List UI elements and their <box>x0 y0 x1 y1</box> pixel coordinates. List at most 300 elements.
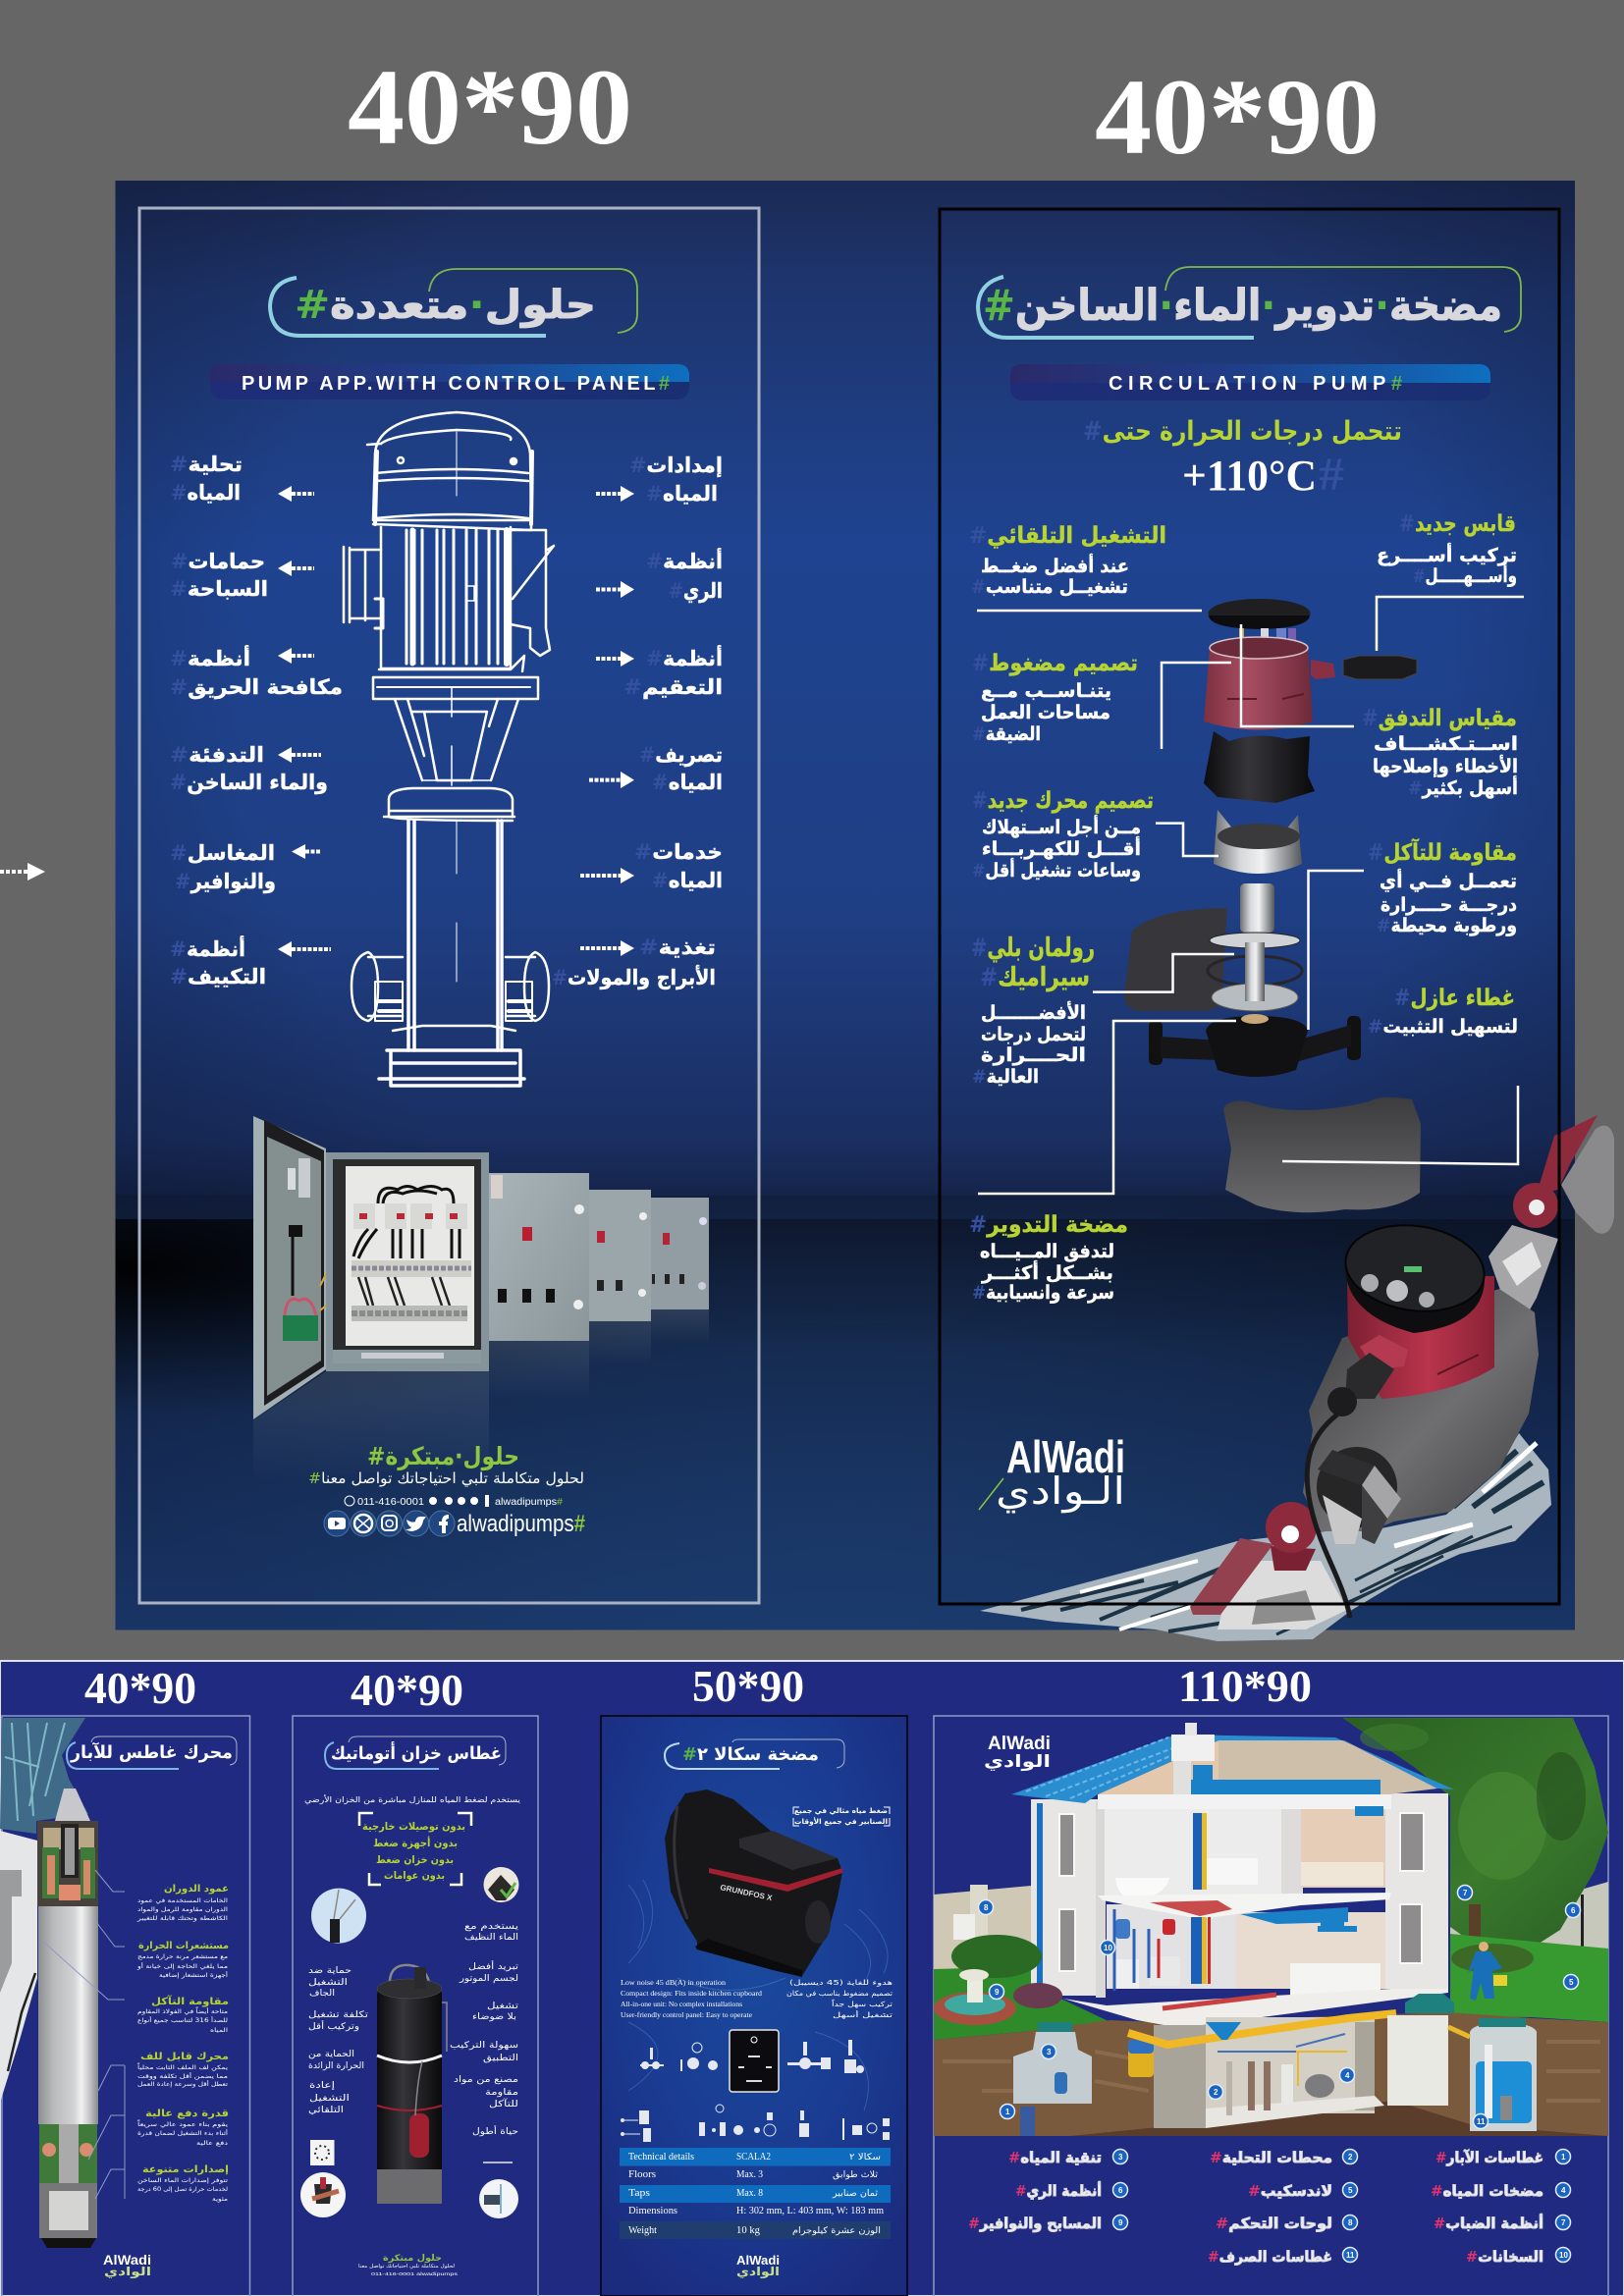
benefits right column: مقاومة <box>485 2088 518 2098</box>
service labels: right column: المياه# <box>652 771 723 794</box>
feature: circulation pump: مضخة التدوير# <box>969 1212 1128 1238</box>
footer: حلول مبتكرة <box>383 2254 442 2264</box>
black housing <box>1204 731 1315 803</box>
small heading: 40*90 second: 40*90 <box>351 1666 463 1715</box>
temperature value: +110°C <box>1182 452 1317 500</box>
caption: الصنابير في جميع الأوقات <box>794 1817 888 1826</box>
footer: innovative solutions: 011-416-0001 <box>357 1497 424 1508</box>
feature: ceramic bearing <box>971 934 1095 1088</box>
service list: column 1: أنظمة الضباب# <box>1434 2214 1543 2232</box>
soil <box>934 2012 1608 2136</box>
fountain <box>934 1969 1016 2025</box>
technical table: 10 kg <box>736 2225 760 2236</box>
numbered markers: 5 <box>1569 1978 1574 1987</box>
benefits left column: الحرارة الزائدة <box>308 2061 364 2071</box>
technical table: ثلاث طوابق <box>833 2170 879 2180</box>
technical table: Weight <box>628 2225 657 2236</box>
red motor housing <box>1204 637 1335 730</box>
logo: AlWadi <box>736 2253 780 2268</box>
exploded pump parts <box>977 597 1524 1212</box>
numbered markers <box>978 1885 1581 2128</box>
service labels: right column: تغذية# <box>639 935 716 959</box>
logo: الوادي <box>736 2265 780 2279</box>
grey background <box>0 0 1624 1661</box>
feature texts <box>136 1884 229 2203</box>
pump base <box>1149 1014 1361 1077</box>
feature: automatic operation: التشغيل التلقائي# <box>969 523 1166 549</box>
feature: ceramic bearing: رولمان بلي# <box>971 934 1095 963</box>
feature: circulation pump: سرعة وانسيابية# <box>972 1282 1114 1304</box>
lower floor rooms <box>1107 1904 1385 1995</box>
numbered markers: 3 <box>1047 2048 1052 2056</box>
features arabic: تركيب سهل جداً <box>831 1999 893 2008</box>
features english <box>621 1979 763 2019</box>
numbered markers: 10 <box>1104 1944 1112 1952</box>
title: محرك غاطس للآبار <box>70 1741 233 1763</box>
feature texts: تتوفر إصدارات الماء الساخن <box>137 2177 228 2184</box>
attic <box>1098 1740 1437 1794</box>
title: غطاس خزان أتوماتيك <box>331 1741 502 1764</box>
service labels: left column: أنظمة# <box>170 644 250 670</box>
lower duct <box>1240 1907 1357 1932</box>
service list: column 1 <box>1431 2149 1571 2266</box>
numbered markers: 9 <box>995 1988 1000 1997</box>
filter vessel <box>1128 2040 1154 2077</box>
feature: ceramic bearing: العالية# <box>972 1066 1039 1088</box>
benefits right column: سهولة التركيب <box>450 2041 518 2051</box>
numbered markers: 8 <box>984 1903 989 1912</box>
logo <box>979 1431 1125 1514</box>
feature: circulation pump: بشــكل أكثـــر <box>981 1260 1113 1284</box>
numbered markers: 11 <box>1477 2117 1486 2126</box>
service list: column 3: تنقية المياه# <box>1008 2149 1102 2166</box>
chimney <box>1171 1723 1215 1795</box>
technical table: Max. 3 <box>736 2169 763 2180</box>
benefits left column: التشغيل <box>308 1978 348 1988</box>
service labels: left column: مكافحة الحريق# <box>170 675 343 699</box>
risers lower <box>1191 1917 1211 1984</box>
scala pump photo <box>665 1789 842 1977</box>
service labels: left column: والماء الساخن# <box>170 771 328 794</box>
title frame <box>665 1739 844 1769</box>
panel: automatic tank submersible <box>293 1716 538 2296</box>
service list: column 2: 11 <box>1346 2251 1355 2260</box>
logo: AlWadi <box>103 2252 151 2268</box>
open door <box>253 1116 329 1419</box>
subtitle band: CIRCULATION PUMP # <box>1109 373 1402 395</box>
top display disc <box>1208 599 1310 650</box>
panel: multiple solutions <box>139 208 759 1603</box>
service list: column 2: 8 <box>1348 2218 1353 2227</box>
feature: compact design: مساحات العمل <box>981 702 1110 723</box>
feature: corrosion resistance: درجـــة حــــرارة <box>1380 894 1517 916</box>
logo: الوادي <box>984 1752 1051 1772</box>
service labels: right column <box>552 454 723 990</box>
feature: insulating cover: غطاء عازل# <box>1394 986 1515 1011</box>
benefits right column: مصنع من مواد <box>454 2075 518 2085</box>
feature texts: مع مستشعر مرنة حرارة مدمج <box>137 1953 228 1960</box>
service labels: right column: الأبراج والمولات# <box>552 964 716 990</box>
service labels: right column: الري# <box>669 579 723 604</box>
left well <box>1013 2022 1092 2136</box>
feature: circulation pump <box>969 1212 1128 1304</box>
insulation jacket <box>1124 908 1227 1011</box>
title: مضخة·تدوير·الماء·الساخن# <box>983 281 1502 331</box>
feature: flow meter: مقياس التدفق# <box>1362 706 1517 731</box>
service list: column 2: 5 <box>1348 2186 1353 2195</box>
feature: new plug: تركيب أســــرع <box>1377 543 1517 566</box>
septic tank lid <box>1405 1994 1454 2013</box>
lawns <box>934 1934 1608 2040</box>
subtitle band <box>210 364 689 400</box>
feature: new motor design: وساعات تشغيل أقل# <box>972 858 1141 881</box>
tree <box>1342 1718 1608 1953</box>
service list: column 2: غطاسات الصرف# <box>1208 2248 1332 2266</box>
ground slab <box>1063 1989 1448 2028</box>
tank pump <box>377 1965 447 2204</box>
plug <box>1343 656 1417 679</box>
feature: compact design: الضيقة# <box>972 723 1041 745</box>
windows <box>1059 1813 1424 1971</box>
benefits left column: التشغيل <box>309 2094 350 2104</box>
feature texts: مئوية <box>212 2196 228 2203</box>
features arabic <box>786 1979 893 2019</box>
feature texts: الكاشطة وتحتك قابلة للتغيير <box>136 1915 228 1922</box>
right well <box>1448 2018 1537 2131</box>
technical table: Floors <box>628 2169 656 2180</box>
subtitle band <box>1010 364 1490 400</box>
basement <box>1154 2017 1384 2128</box>
service labels: left column: تحلية# <box>170 453 243 476</box>
feature: corrosion resistance <box>1368 837 1517 936</box>
panel: submersible well motor <box>0 1716 249 2296</box>
function icons <box>621 2040 890 2142</box>
service list: column 3: 3 <box>1118 2153 1123 2162</box>
benefits left column: وتركيب أقل <box>308 2020 359 2032</box>
technical table: Max. 8 <box>736 2188 763 2199</box>
floor reflection <box>253 1309 709 1482</box>
technical table: SCALA2 <box>736 2152 771 2163</box>
feature texts: إصدارات متنوعة <box>142 2164 229 2175</box>
connector <box>1327 1335 1408 1416</box>
house walls <box>1031 1793 1448 1998</box>
service list: column 3 <box>968 2149 1127 2232</box>
pump blueprint sketch <box>344 412 554 1086</box>
service labels: left column: المياه# <box>171 481 241 505</box>
technical table <box>620 2148 891 2239</box>
benefits left column: حماية ضد <box>308 1966 352 1976</box>
benefits right column: للتآكل <box>489 2098 518 2109</box>
logo <box>736 2253 780 2279</box>
feature: new motor design: تصميم محرك جديد# <box>972 788 1154 814</box>
feature texts: الدوران مقاومة للرمل والمواد <box>137 1906 228 1913</box>
benefits left column: الجاف <box>309 1989 335 1999</box>
service labels: left column: والنوافير# <box>175 870 276 893</box>
benefits left column: الحماية من <box>308 2050 354 2059</box>
service list: column 1: 7 <box>1561 2218 1566 2227</box>
shaft <box>1240 883 1274 933</box>
service labels: right column: المياه# <box>646 482 718 506</box>
risers upper <box>1193 1813 1207 1890</box>
features english: Compact design: Fits inside kitchen cupboard <box>621 1990 763 1998</box>
panel: circulation pump <box>940 209 1614 1641</box>
heading: size 40*90 left: 40*90 <box>348 47 632 167</box>
service list: column 3: المسابح والنوافير# <box>968 2215 1102 2232</box>
white machinery photo <box>0 1831 37 2103</box>
benefits left column: إعادة <box>309 2081 335 2091</box>
title frame <box>67 1736 237 1769</box>
subtitle band: PUMP APP.WITH CONTROL PANEL# <box>242 373 670 395</box>
no-needs list: بدون توصيلات خارجية <box>362 1821 465 1833</box>
heading: size 40*90 right: 40*90 <box>1095 57 1380 177</box>
benefits right column: تشغيل <box>487 2002 519 2011</box>
water splash texture <box>628 1880 888 2110</box>
panel background <box>601 1716 907 2296</box>
feature: insulating cover <box>1368 986 1518 1038</box>
small heading: 110*90: 110*90 <box>1178 1662 1312 1711</box>
service labels: left column: السباحة# <box>170 577 268 601</box>
feature texts: قدرة دفع عالية <box>145 2109 229 2119</box>
back panel 2 <box>589 1190 651 1321</box>
title: مضخة سكالا ٢# <box>682 1744 819 1765</box>
technical table: Taps <box>628 2188 650 2199</box>
panel frame <box>934 1716 1608 2296</box>
feature texts: عمود الدوران <box>164 1884 229 1895</box>
scala pump photo: GRUNDFOS X <box>720 1883 774 1902</box>
service labels: left column: أنظمة# <box>170 934 245 961</box>
downpipe <box>1037 1803 1043 1984</box>
features english: All-in-one unit: No complex installations <box>621 2001 742 2008</box>
title: حلول·متعددة# <box>295 283 596 328</box>
logo: AlWadi <box>988 1734 1051 1754</box>
technical table: H: 302 mm, L: 403 mm, W: 183 mm <box>736 2206 884 2216</box>
service list: column 2: 2 <box>1348 2153 1353 2162</box>
service list: column 2: محطات التحلية# <box>1210 2149 1332 2166</box>
service labels: right column: إمدادات# <box>629 454 723 477</box>
feature texts: مستشعرات الحرارة <box>138 1941 229 1951</box>
small heading: 40*90: 40*90 <box>84 1664 196 1713</box>
footer: innovative solutions: alwadipumps # <box>495 1497 563 1508</box>
benefits right column: لجسم الموتور <box>459 1974 518 1984</box>
heating floor <box>1150 1900 1232 1916</box>
white shaft <box>1387 2015 1448 2106</box>
panel frame <box>139 208 759 1603</box>
roof <box>1011 1735 1454 1803</box>
service list: column 1: مضخات المياه# <box>1431 2182 1543 2200</box>
stator <box>1214 810 1302 874</box>
numbered markers: 2 <box>1214 2088 1218 2097</box>
feature texts: متاحة أيضاً في الفولاذ المقاوم <box>137 2007 228 2015</box>
feature texts: يقوم بناء عمود عالي سريعاً <box>136 2120 228 2128</box>
footer: innovative solutions: لحلول متكاملة تلبي احتياجاتك تواصل معنا# <box>308 1469 584 1488</box>
service labels: left column <box>170 453 343 988</box>
benefits left column: تكلفة تشغيل <box>308 2010 369 2020</box>
technical table: سكالا ٢ <box>849 2153 881 2163</box>
feature: new plug <box>1377 511 1517 587</box>
service list: column 2 <box>1208 2149 1357 2266</box>
feature: automatic operation: عند أفضل ضغــط <box>981 554 1129 577</box>
service list: column 3: أنظمة الري# <box>1015 2181 1102 2201</box>
red motor <box>1347 1276 1494 1399</box>
water photo <box>0 1718 88 1834</box>
bearing rings <box>1208 933 1302 1011</box>
feature texts: تعطل أقل وسرعة إعادة العمل <box>137 2080 228 2088</box>
feature: new motor design <box>972 788 1154 881</box>
panel: house water systems <box>934 1716 1608 2296</box>
feature texts: مما يلغي الحاجة إلى خيانة أو <box>136 1962 228 1970</box>
numbered markers: 7 <box>1463 1889 1468 1897</box>
yellow main pipe <box>1128 2013 1396 2045</box>
feature: new plug: وأســـهـــــل# <box>1413 563 1517 587</box>
numbered markers: 6 <box>1571 1906 1576 1915</box>
technical table: ثمان صنابير <box>832 2189 879 2199</box>
service labels: right column: خدمات# <box>634 840 723 864</box>
service list: column 1: 1 <box>1561 2153 1566 2162</box>
footer <box>358 2254 459 2276</box>
feature texts: للصدأ 316 لتناسب جميع أنواع <box>137 2016 228 2024</box>
control panels photo <box>253 1116 709 1482</box>
control head <box>1340 1217 1489 1333</box>
round photos <box>300 1867 518 2218</box>
logo: الـوادي <box>996 1469 1125 1514</box>
attic duct <box>1191 1765 1380 1794</box>
benefits right column: تبريد أفضل <box>468 1960 519 1972</box>
leader lines <box>977 597 1524 1194</box>
feature: flow meter <box>1362 706 1518 799</box>
feature: insulating cover: لتسهيل التثبيت# <box>1368 1016 1518 1038</box>
feature texts: محرك قابل للف <box>140 2052 229 2062</box>
features arabic: تصميم مضغوط يناسب في مكان <box>786 1990 893 1998</box>
benefits left column: التلقائي <box>308 2106 344 2115</box>
foam body <box>1303 1289 1539 1531</box>
features english: Low noise 45 dB(A) in operation <box>621 1979 727 1987</box>
feature: flow meter: اســتـكشـــاف <box>1374 733 1518 755</box>
hex nut <box>1317 1447 1401 1544</box>
arrow at page edge <box>0 863 45 881</box>
feature texts: دفع عالية <box>196 2140 228 2147</box>
motor cutaway <box>37 1789 98 2248</box>
feature: ceramic bearing: الأفضـــــــل <box>981 1001 1086 1024</box>
feature: corrosion resistance: ورطوبة محيطة# <box>1377 915 1517 936</box>
feature texts: أثناء بدء التشغيل لضمان قدرة <box>137 2129 228 2137</box>
worker <box>1468 1942 1507 2001</box>
service list: column 3: 9 <box>1118 2218 1123 2227</box>
feature: compact design: تصميم مضغوط# <box>972 651 1138 676</box>
service labels: right column: أنظمة# <box>646 644 723 670</box>
control panel <box>730 2030 779 2092</box>
top slab <box>1098 1794 1391 1809</box>
feature: ceramic bearing: سيراميك# <box>980 963 1090 992</box>
benefits right column <box>450 1922 519 2137</box>
feature: flow meter: أسهل بكثير# <box>1408 775 1518 799</box>
technical table: Dimensions <box>628 2206 677 2216</box>
service list: column 1: 10 <box>1559 2251 1568 2260</box>
service labels: left column: المغاسل# <box>170 841 275 865</box>
social media row: alwadipumps# <box>457 1511 585 1537</box>
water splash <box>980 1433 1551 1641</box>
feature: automatic operation <box>969 523 1166 598</box>
service labels: left column: حمامات# <box>171 550 265 573</box>
panel frame <box>940 209 1559 1604</box>
technical table: Technical details <box>628 2152 694 2163</box>
feature: new plug: قابس جديد# <box>1399 511 1516 537</box>
feature texts: لخدمات حرارة تصل إلى 60 درجة <box>137 2186 228 2193</box>
leader lines <box>42 1870 125 2199</box>
assembled circulation pump photo <box>980 1115 1614 1641</box>
service labels: right column: تصريف# <box>639 743 723 767</box>
feature: corrosion resistance: تعمــل فــي أي <box>1380 869 1517 893</box>
logo <box>984 1734 1051 1772</box>
features arabic: هدوء للغاية (45 ديسيبل) <box>789 1979 893 1987</box>
footer: innovative solutions: حلول·مبتكرة# <box>367 1442 519 1471</box>
benefits right column: بلا ضوضاء <box>472 2012 516 2022</box>
feature texts: الخامات المستخدمة في عمود <box>137 1897 228 1904</box>
bottom valve <box>1190 1502 1347 1629</box>
fences <box>934 1882 1608 1969</box>
panel frame <box>293 1716 538 2296</box>
feature: ceramic bearing: لتحمل درجات <box>981 1024 1086 1045</box>
lower blue band <box>0 1661 1624 2296</box>
panel: scala 2 pump <box>601 1716 907 2296</box>
feature: ceramic bearing: الحــــرارة <box>981 1044 1086 1066</box>
feature: circulation pump: لتدفق المــيـــاه <box>980 1241 1114 1262</box>
no-needs list: بدون خزان ضغط <box>376 1854 454 1866</box>
service labels: right column: التعقيم# <box>623 675 723 699</box>
feature texts: المياه <box>210 2027 228 2034</box>
house illustration <box>934 1718 1608 2136</box>
panel frame <box>2 1716 249 2296</box>
logo: الوادي <box>104 2265 151 2279</box>
footer: لحلول متكاملة تلبي احتياجاتك تواصل معنا <box>358 2264 456 2269</box>
temperature value: # <box>1319 449 1344 501</box>
caption: ضغط مياه مثالي في جميع <box>794 1806 888 1815</box>
service list: column 1: 4 <box>1561 2186 1566 2195</box>
feature: automatic operation: تشغيــل متناسب# <box>971 576 1128 598</box>
benefits right column: التطبيق <box>483 2054 518 2063</box>
power cable <box>1307 1415 1350 1618</box>
logo <box>103 2252 151 2279</box>
benefits right column: يستخدم مع <box>464 1922 519 1932</box>
service labels: right column: أنظمة# <box>646 547 723 573</box>
service list: column 1: السخانات# <box>1466 2248 1543 2266</box>
features english: User-friendly control panel: Easy to operate <box>621 2011 752 2019</box>
service labels: left column: التدفئة# <box>170 743 264 767</box>
social media row <box>324 1511 585 1537</box>
title frame <box>978 267 1521 338</box>
footer: innovative solutions <box>308 1442 584 1508</box>
service labels: right column: المياه# <box>652 869 723 892</box>
feature: compact design <box>972 651 1138 745</box>
small heading: 50*90: 50*90 <box>692 1662 804 1711</box>
feature texts: مما يضمن أقل تكلفة ووقت <box>137 2072 228 2080</box>
technical table: الوزن عشرة كيلوجرام <box>792 2226 881 2236</box>
service list: column 1: غطاسات الآبار# <box>1435 2149 1543 2166</box>
upper floor rooms <box>1105 1806 1385 1899</box>
service list: column 3: 6 <box>1118 2186 1123 2195</box>
feature texts: مقاومة التآكل <box>151 1995 229 2007</box>
open cabinet <box>326 1152 489 1371</box>
benefits left column <box>308 1966 369 2115</box>
title frame <box>325 1736 506 1769</box>
intro line: يستخدم لضغط المياه للمنازل مباشرة من الخزان الأرضي <box>304 1794 520 1804</box>
feature: compact design: يتنـاســب مــع <box>981 680 1111 702</box>
temperature heading: تتحمل درجات الحرارة حتى# <box>1083 416 1402 447</box>
features arabic: تشغيل أسهل <box>833 2010 893 2019</box>
blue funnel <box>1206 2022 1241 2040</box>
top valve <box>1489 1115 1614 1320</box>
main blue banner <box>116 181 1575 1629</box>
feature: new motor design: مــن أجل اســتهلاك <box>982 815 1141 838</box>
